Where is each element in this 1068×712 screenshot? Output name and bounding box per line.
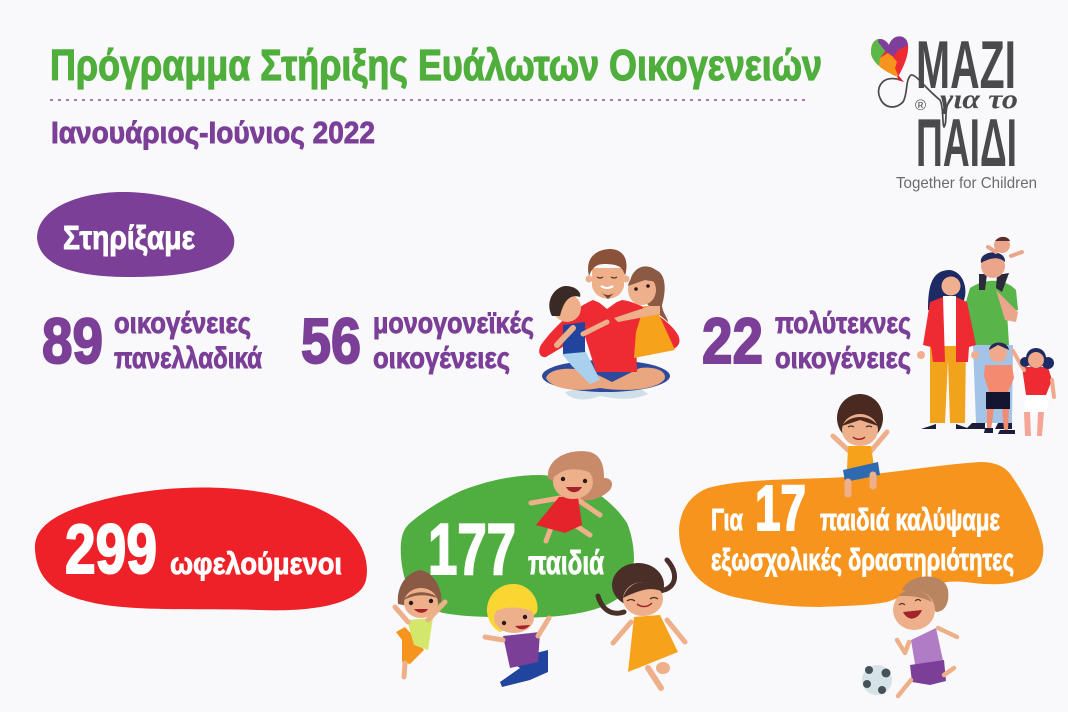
illustration: soccer boy xyxy=(862,576,957,696)
stat: 89 families: οικογένειες xyxy=(114,307,251,340)
logo wordmark: για το: για το xyxy=(940,84,1018,114)
socks xyxy=(565,388,648,399)
icon: puzzle heart balloon xyxy=(868,32,951,127)
illustration: girl with braids xyxy=(598,560,685,688)
panel: 299 beneficiaries: 299 xyxy=(65,510,157,588)
illustration: father with two children xyxy=(539,249,679,399)
subtitle: period: Ιανουάριος-Ιούνιος 2022 xyxy=(51,115,375,150)
stat: 22 large families: οικογένειες xyxy=(775,342,911,375)
illustration: boy in green shirt xyxy=(395,570,445,677)
badge: we supported: Στηρίξαμε xyxy=(63,219,195,256)
panel: 177 children: παιδιά xyxy=(528,544,604,581)
illustration: family of five xyxy=(917,237,1054,436)
panel: 17 children extracurricular: Για xyxy=(711,502,743,537)
panel: 17 children extracurricular xyxy=(679,462,1043,607)
icon: soccer ball xyxy=(862,665,892,695)
father head xyxy=(592,268,624,299)
title: Πρόγραμμα Στήριξης Ευάλωτων Οικογενειών xyxy=(50,41,822,90)
boy xyxy=(984,342,1015,434)
stat: 22 large families: πολύτεκνες xyxy=(775,307,911,340)
panel: 177 children xyxy=(401,475,634,618)
girl xyxy=(1013,348,1054,436)
illustration: girl in red dress xyxy=(531,451,612,541)
stat: 56 single parent families: μονογονεϊκές xyxy=(373,307,534,340)
logo tagline: Together for Children xyxy=(896,175,1037,192)
man xyxy=(965,237,1022,429)
illustration: blond boy xyxy=(485,584,549,687)
red shirt xyxy=(539,300,679,372)
panel: 177 children: 177 xyxy=(428,510,516,590)
legs xyxy=(542,360,670,392)
panel: 299 beneficiaries xyxy=(35,488,367,610)
stat: 56 single parent families: 56 xyxy=(301,305,361,377)
stat: 56 single parent families xyxy=(301,305,534,377)
logo xyxy=(868,27,1037,192)
badge: we supported xyxy=(37,192,234,277)
stat: 22 large families xyxy=(702,305,911,377)
panel: 299 beneficiaries: ωφελούμενοι xyxy=(170,546,342,581)
panel: 17 children extracurricular: 17 xyxy=(755,472,806,544)
stat: 56 single parent families: οικογένειες xyxy=(373,342,510,375)
panel: 17 children extracurricular: παιδιά καλύψαμε xyxy=(820,502,1000,537)
stat: 89 families: 89 xyxy=(42,305,103,377)
stat: 22 large families: 22 xyxy=(702,305,763,377)
illustration: boy sitting on blob xyxy=(833,394,887,494)
girl xyxy=(630,266,668,322)
registered mark: ® xyxy=(915,97,926,114)
boy xyxy=(562,350,600,384)
stat: 89 families: πανελλαδικά xyxy=(114,342,262,375)
stat: 89 families xyxy=(42,305,262,377)
woman xyxy=(917,270,979,429)
